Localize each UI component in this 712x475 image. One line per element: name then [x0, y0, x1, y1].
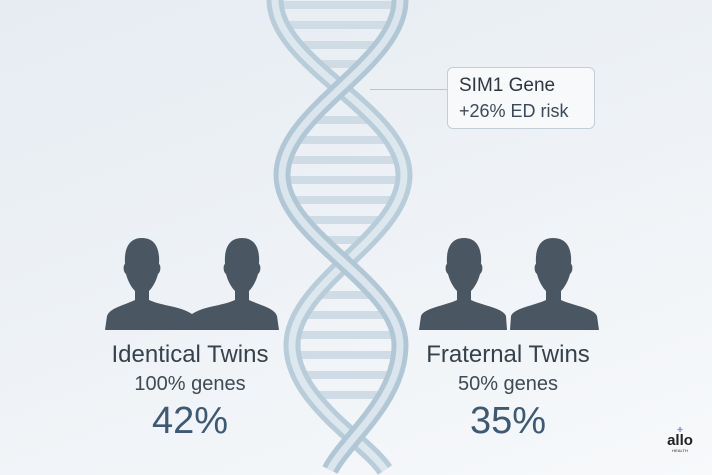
icon: fraternal twins silhouettes: [419, 238, 599, 330]
logo: allo health: allo: [667, 432, 693, 449]
text: identical twins: [112, 341, 268, 442]
text: fraternal twins: 35%: [470, 400, 546, 442]
logo: allo health: [667, 426, 693, 453]
text: fraternal twins: Fraternal Twins: [426, 341, 590, 368]
icon: identical twins silhouettes: [105, 238, 279, 330]
callout: SIM1 Gene: +26% ED risk: [459, 101, 569, 121]
text: identical twins: 100% genes: [134, 373, 246, 395]
logo: allo health: ✚: [677, 427, 683, 434]
callout: SIM1 Gene: [447, 67, 595, 129]
logo: allo health: HEALTH: [672, 448, 688, 453]
callout: SIM1 Gene: SIM1 Gene: [459, 75, 555, 96]
text: fraternal twins: 50% genes: [458, 373, 558, 395]
DNA helix: [266, 0, 412, 475]
callout connector line: [370, 89, 447, 90]
text: identical twins: 42%: [152, 400, 228, 442]
text: identical twins: Identical Twins: [112, 341, 268, 368]
text: fraternal twins: [426, 341, 590, 442]
